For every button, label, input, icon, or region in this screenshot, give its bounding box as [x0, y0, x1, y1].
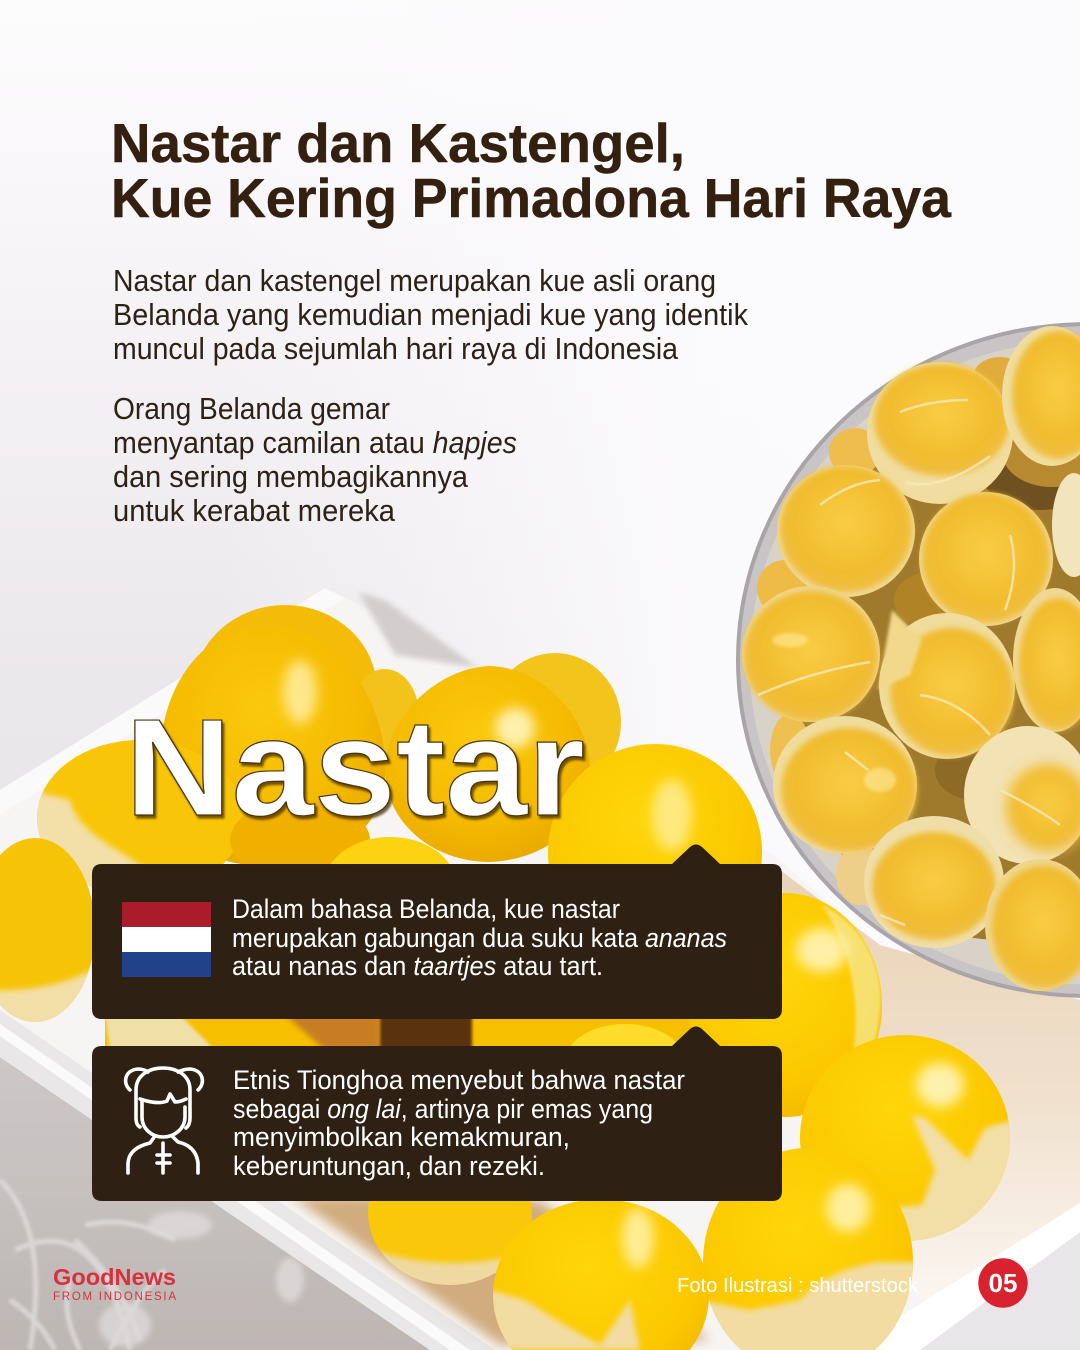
- second paragraph: menyantap camilan atau hapjes: [113, 425, 517, 460]
- logo: GoodNews from Indonesia: FROM INDONESIA: [53, 1291, 176, 1303]
- text: Dutch etymology: atau nanas dan taartjes atau tart.: [232, 951, 603, 981]
- icon: girl with hair buns: [126, 1068, 202, 1173]
- heading: Nastar: Nastar: [125, 691, 585, 845]
- text: Dutch etymology: merupakan gabungan dua suku kata ananas: [232, 923, 727, 953]
- intro paragraph: Nastar dan kastengel merupakan kue asli orang: [113, 263, 716, 298]
- panel: Dutch origin: [92, 844, 782, 1019]
- title: Nastar dan Kastengel,: [111, 112, 685, 174]
- page number badge: 05: [989, 1268, 1017, 1298]
- text: Chinese name meaning: sebagai ong lai, artinya pir emas yang: [233, 1094, 653, 1124]
- title: [111, 112, 951, 229]
- title: Kue Kering Primadona Hari Raya: [111, 167, 951, 229]
- page number badge: [978, 1258, 1028, 1308]
- serving tray: [0, 588, 1080, 1350]
- second paragraph: Orang Belanda gemar: [113, 391, 390, 426]
- second paragraph: untuk kerabat mereka: [113, 493, 396, 528]
- photo credit: Foto Ilustrasi : shutterstock: [677, 1275, 919, 1297]
- panel: Chinese meaning: [92, 1026, 782, 1201]
- text: Chinese name meaning: keberuntungan, dan rezeki.: [233, 1151, 545, 1181]
- logo: GoodNews from Indonesia: [53, 1264, 176, 1303]
- intro paragraph: [113, 263, 748, 366]
- glass jar with golden nastar: [738, 324, 1080, 996]
- text: Chinese name meaning: menyimbolkan kemakmuran,: [233, 1122, 570, 1152]
- text: Chinese name meaning: Etnis Tionghoa menyebut bahwa nastar: [233, 1065, 685, 1095]
- text: Chinese name meaning: [233, 1065, 685, 1181]
- text: Dutch etymology: [232, 894, 727, 981]
- tray cookies: [0, 605, 1020, 1350]
- second paragraph: dan sering membagikannya: [113, 459, 469, 494]
- icon: Netherlands flag: [122, 902, 211, 977]
- logo: GoodNews from Indonesia: GoodNews: [53, 1264, 176, 1290]
- second paragraph: [113, 391, 517, 528]
- intro paragraph: muncul pada sejumlah hari raya di Indonesia: [113, 331, 679, 366]
- intro paragraph: Belanda yang kemudian menjadi kue yang identik: [113, 297, 748, 332]
- text: Dutch etymology: Dalam bahasa Belanda, kue nastar: [232, 894, 620, 924]
